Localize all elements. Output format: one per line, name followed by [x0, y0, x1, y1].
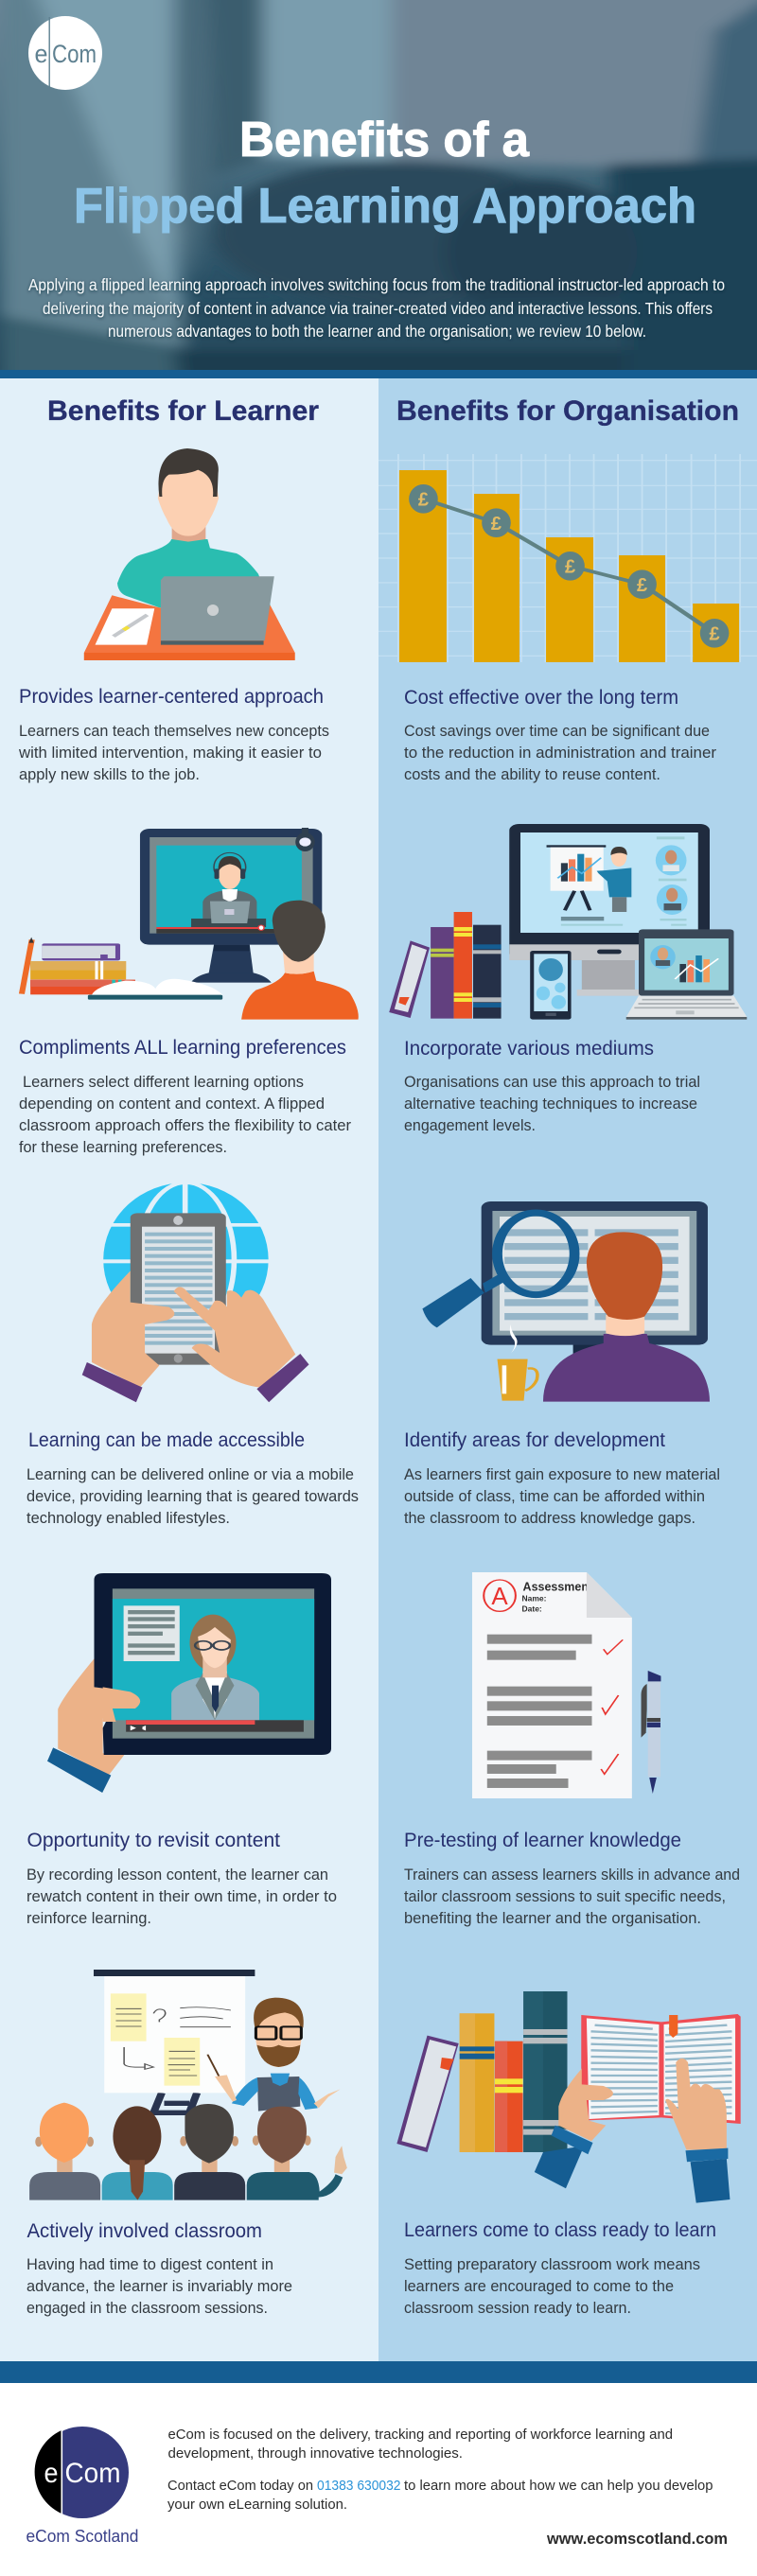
- item: identify areas for development: Identify areas for development: [404, 1429, 665, 1451]
- books: [389, 912, 502, 1019]
- item: incorporate various mediums: Incorporate various mediums: [404, 1038, 654, 1060]
- illustration: assessment paper and pen: A: [491, 1582, 508, 1610]
- footer logo: eCom Scotland: eCom Scotland: [26, 2527, 138, 2546]
- item: compliments all learning preferences: Learners select different learning options: [23, 1073, 304, 1091]
- mug: [498, 1359, 528, 1401]
- title: Benefits of a: [239, 113, 530, 167]
- panel: organisation column background: [378, 378, 757, 2361]
- right hand: [174, 1287, 295, 1388]
- illustration: classroom with presenter: [29, 1970, 347, 2200]
- chart: falling cost bars: £: [637, 575, 647, 596]
- heading: benefits for organisation: Benefits for Organisation: [396, 395, 739, 427]
- open book: [581, 2014, 741, 2124]
- item: compliments all learning preferences: for these learning preferences.: [19, 1138, 227, 1156]
- illustration: devices and books: [389, 824, 747, 1020]
- item: provides learner-centered approach: [18, 686, 329, 783]
- item: pre-testing of learner knowledge: benefiting the learner and the organisation.: [404, 1909, 701, 1927]
- logo: eCom header: [28, 16, 102, 90]
- chart: falling cost bars: £: [565, 557, 575, 578]
- item: actively involved classroom: [26, 2220, 292, 2317]
- item: learning can be made accessible: [26, 1429, 359, 1527]
- footer logo: eCom Scotland: Com: [64, 2458, 121, 2489]
- chart: falling cost bars: £: [418, 490, 429, 511]
- illustration: books and open book with hands: [396, 1991, 741, 2203]
- item: learners come to class ready to learn: Learners come to class ready to learn: [404, 2219, 716, 2241]
- laptop: [626, 929, 747, 1020]
- footer text: [167, 2427, 713, 2513]
- books and pencil: [22, 938, 222, 1000]
- item: pre-testing of learner knowledge: tailor classroom sessions to suit specific needs,: [404, 1887, 726, 1905]
- panel: learner column background: [0, 378, 378, 2361]
- item: cost effective: Cost effective over the long term: [404, 687, 678, 709]
- phone: [530, 951, 572, 1020]
- footer logo: eCom Scotland: [26, 2427, 138, 2546]
- footer text: Contact eCom today on: [167, 2478, 313, 2494]
- item: opportunity to revisit content: [26, 1830, 337, 1927]
- item: pre-testing of learner knowledge: [404, 1830, 740, 1927]
- illustration: assessment paper and pen: Date:: [522, 1603, 542, 1613]
- pen: [642, 1671, 660, 1794]
- item: opportunity to revisit content: rewatch content in their own time, in order to: [26, 1887, 337, 1905]
- logo: eCom header: e: [34, 40, 47, 68]
- item: pre-testing of learner knowledge: Trainers can assess learners skills in advance and: [404, 1866, 740, 1884]
- item: learning can be made accessible: device, providing learning that is geared towards: [26, 1487, 359, 1505]
- item: compliments all learning preferences: classroom approach offers the flexibility to cater: [19, 1116, 351, 1134]
- left hand: [92, 1270, 174, 1388]
- item: compliments all learning preferences: [19, 1037, 351, 1156]
- left hand and sleeve: [535, 2069, 613, 2188]
- title: Flipped Learning Approach: [74, 179, 696, 234]
- illustration: assessment paper and pen: Name:: [522, 1593, 547, 1603]
- item: identify areas for development: outside of class, time can be afforded within: [404, 1487, 705, 1505]
- item: incorporate various mediums: engagement levels.: [404, 1116, 536, 1134]
- item: opportunity to revisit content: Opportunity to revisit content: [26, 1830, 280, 1851]
- item: learners come to class ready to learn: classroom session ready to learn.: [404, 2299, 631, 2317]
- footer text: to learn more about how we can help you develop: [404, 2478, 713, 2494]
- item: identify areas for development: [404, 1429, 720, 1527]
- intro text: numerous advantages to both the learner and the organisation; we review 10 below.: [108, 322, 646, 341]
- item: identify areas for development: the classroom to address knowledge gaps.: [404, 1509, 695, 1527]
- audience: [29, 2103, 347, 2200]
- footer logo: eCom Scotland: e: [44, 2458, 59, 2489]
- heading: benefits for learner: Benefits for Learner: [47, 395, 319, 427]
- item: provides learner-centered approach: Provides learner-centered approach: [19, 686, 324, 708]
- item: provides learner-centered approach: with limited intervention, making it easier to: [18, 744, 322, 762]
- presenter: [207, 1998, 341, 2112]
- item: opportunity to revisit content: reinforce learning.: [26, 1909, 151, 1927]
- item: provides learner-centered approach: apply new skills to the job.: [19, 765, 200, 783]
- website url: www.ecomscotland.com: [546, 2530, 728, 2548]
- item: actively involved classroom: engaged in the classroom sessions.: [26, 2299, 268, 2317]
- title: [74, 113, 696, 234]
- item: actively involved classroom: advance, the learner is invariably more: [26, 2277, 292, 2295]
- viewer: [241, 901, 359, 1020]
- illustration: learner at laptop: [84, 448, 295, 660]
- chart: falling cost bars: [378, 454, 757, 662]
- illustration: video lesson on monitor: [22, 828, 359, 1020]
- item: provides learner-centered approach: Learners can teach themselves new concepts: [19, 722, 329, 740]
- item: learning can be made accessible: Learning can be made accessible: [28, 1429, 305, 1451]
- item: incorporate various mediums: [404, 1038, 700, 1134]
- chart: falling cost bars: £: [710, 624, 720, 645]
- item: cost effective: [404, 687, 716, 783]
- item: cost effective: to the reduction in administration and trainer: [404, 744, 716, 762]
- header photo background: [0, 0, 757, 385]
- footer text: eCom is focused on the delivery, tracking and reporting of workforce learning and: [168, 2427, 673, 2443]
- item: cost effective: costs and the ability to reuse content.: [404, 765, 660, 783]
- item: learners come to class ready to learn: learners are encouraged to come to the: [404, 2277, 674, 2295]
- person from behind: [543, 1334, 710, 1402]
- illustration: assessment paper and pen: [472, 1572, 660, 1798]
- footer text: development, through innovative technologies.: [168, 2445, 463, 2462]
- item: incorporate various mediums: Organisations can use this approach to trial: [404, 1073, 700, 1091]
- intro text: [28, 275, 725, 341]
- item: pre-testing of learner knowledge: Pre-testing of learner knowledge: [404, 1830, 681, 1851]
- item: actively involved classroom: Having had time to digest content in: [26, 2255, 273, 2273]
- item: learners come to class ready to learn: Setting preparatory classroom work means: [404, 2255, 700, 2273]
- item: compliments all learning preferences: Compliments ALL learning preferences: [19, 1037, 346, 1059]
- header divider band: [0, 370, 757, 378]
- logo: eCom header: Com: [52, 40, 97, 68]
- illustration: magnifier on monitor: [422, 1201, 710, 1402]
- illustration: hands holding tablet over globe: [82, 1183, 309, 1402]
- item: compliments all learning preferences: depending on content and context. A flipped: [19, 1095, 325, 1113]
- item: opportunity to revisit content: By recording lesson content, the learner can: [26, 1866, 328, 1884]
- chart: falling cost bars: £: [491, 514, 502, 534]
- footer text: your own eLearning solution.: [167, 2497, 347, 2513]
- illustration: assessment paper and pen: Assessment: [523, 1581, 592, 1594]
- item: incorporate various mediums: alternative teaching techniques to increase: [404, 1095, 697, 1113]
- item: learning can be made accessible: technology enabled lifestyles.: [26, 1509, 230, 1527]
- footer band: [0, 2361, 757, 2383]
- item: learning can be made accessible: Learning can be delivered online or via a mobile: [26, 1465, 354, 1483]
- illustration: hand holding tablet with lesson: [47, 1573, 331, 1793]
- item: identify areas for development: As learners first gain exposure to new material: [404, 1465, 720, 1483]
- item: learners come to class ready to learn: [404, 2219, 716, 2317]
- item: cost effective: Cost savings over time can be significant due: [404, 722, 710, 740]
- right hand and sleeve: [665, 2059, 730, 2203]
- footer text: 01383 630032: [317, 2478, 401, 2494]
- item: actively involved classroom: Actively involved classroom: [26, 2220, 262, 2242]
